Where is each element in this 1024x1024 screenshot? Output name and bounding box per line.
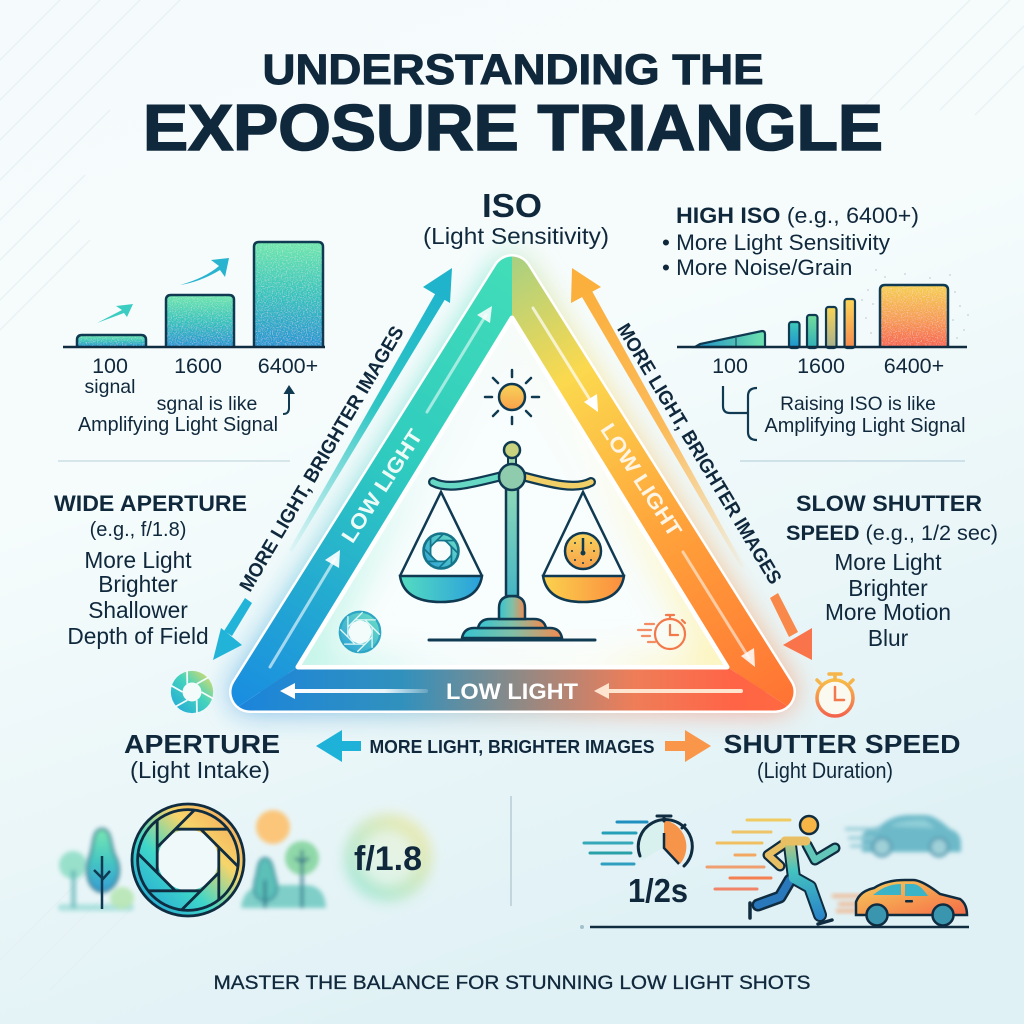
note: raising ISO right [723, 386, 966, 440]
icon: sun [485, 370, 539, 424]
slow shutter text: More Motion [825, 599, 951, 625]
chart: signal bars left: 100 [92, 354, 128, 378]
arrow: right side double [571, 268, 812, 660]
slow shutter text: SLOW SHUTTER [796, 491, 982, 516]
note: raising ISO right: Amplifying Light Signal [764, 415, 966, 437]
ISO heading [423, 187, 609, 249]
shutter speed label [724, 729, 960, 783]
low light labels: LOW LIGHT [337, 425, 428, 547]
icon: small aperture in triangle [340, 612, 380, 652]
shutter speed label: (Light Duration) [757, 758, 893, 783]
f-number badge: f/1.8 [354, 840, 422, 878]
bottom arrow label [316, 730, 711, 762]
arrow: left side double [213, 268, 452, 660]
aperture label: APERTURE [124, 729, 280, 759]
triangle glow [250, 275, 775, 692]
note: raising ISO right: Raising ISO is like [780, 394, 936, 415]
side label left: MORE LIGHT, BRIGHTER IMAGES [235, 322, 409, 596]
chart: signal bars left: 6400+ [258, 354, 318, 378]
wide aperture text: More Light [84, 547, 192, 573]
ISO heading: ISO [482, 187, 542, 224]
chart: signal bars left [63, 242, 325, 398]
bottom arrow label: MORE LIGHT, BRIGHTER IMAGES [370, 737, 654, 757]
ISO heading: (Light Sensitivity) [423, 223, 609, 249]
side label right: MORE LIGHT, BRIGHTER IMAGES [612, 320, 786, 588]
note: amplifying left [78, 385, 295, 436]
high ISO text: HIGH ISO (e.g., 6400+) [676, 203, 919, 228]
icon: balance scale [400, 442, 624, 640]
slow shutter text [786, 491, 998, 651]
icon: large aperture [132, 804, 244, 916]
icon: blurred car [845, 815, 961, 856]
scene: blurred sun and trees [241, 810, 326, 908]
wide aperture text: Depth of Field [67, 623, 209, 649]
shutter speed label: SHUTTER SPEED [724, 729, 960, 759]
icon: stopwatch corner [817, 674, 853, 716]
low light labels: LOW LIGHT [596, 419, 686, 541]
note: amplifying left: sgnal is like [157, 393, 257, 415]
title: EXPOSURE TRIANGLE [143, 91, 883, 164]
footer: MASTER THE BALANCE FOR STUNNING LOW LIGHT SHOTS [214, 973, 810, 994]
exposure triangle [250, 275, 775, 692]
slow shutter text: More Light [834, 549, 942, 575]
high ISO text: • More Light Sensitivity [662, 230, 891, 255]
chart: noise bars right: 100 [712, 354, 748, 378]
chart: noise bars right: 1600 [797, 354, 845, 378]
icon: stopwatch with speed lines: 1/2s [628, 872, 688, 909]
title [143, 46, 883, 164]
scene: pear tree [87, 829, 119, 909]
wide aperture text [54, 491, 247, 649]
wide aperture text: WIDE APERTURE [54, 491, 247, 516]
chart: noise bars right [677, 269, 969, 378]
low light labels [337, 419, 686, 704]
chart: signal bars left: 1600 [174, 354, 222, 378]
aperture label [124, 729, 280, 783]
high ISO text [662, 203, 919, 280]
f-number badge [344, 814, 432, 902]
chart: noise bars right: 6400+ [884, 354, 944, 378]
slow shutter text: SPEED (e.g., 1/2 sec) [786, 522, 998, 545]
icon: stopwatch with speed lines [584, 816, 692, 909]
low light labels: LOW LIGHT [446, 679, 579, 704]
icon: running figure with speed lines [707, 816, 835, 924]
ground line [580, 925, 969, 929]
slow shutter text: Blur [868, 625, 909, 651]
band arrows [270, 306, 755, 699]
icon: aperture corner [171, 670, 213, 714]
icon: small stopwatch in triangle [638, 615, 685, 649]
scene: blurred trees left [58, 851, 134, 911]
chart: signal bars left: signal [85, 376, 135, 398]
wide aperture text: (e.g., f/1.8) [90, 519, 186, 541]
wide aperture text: Shallower [88, 597, 188, 623]
wide aperture text: Brighter [98, 571, 178, 597]
high ISO text: • More Noise/Grain [662, 255, 852, 280]
icon: orange car [832, 880, 967, 926]
title: UNDERSTANDING THE [262, 46, 764, 94]
slow shutter text: Brighter [848, 575, 928, 601]
aperture label: (Light Intake) [130, 757, 270, 783]
note: amplifying left: Amplifying Light Signal [78, 414, 278, 436]
